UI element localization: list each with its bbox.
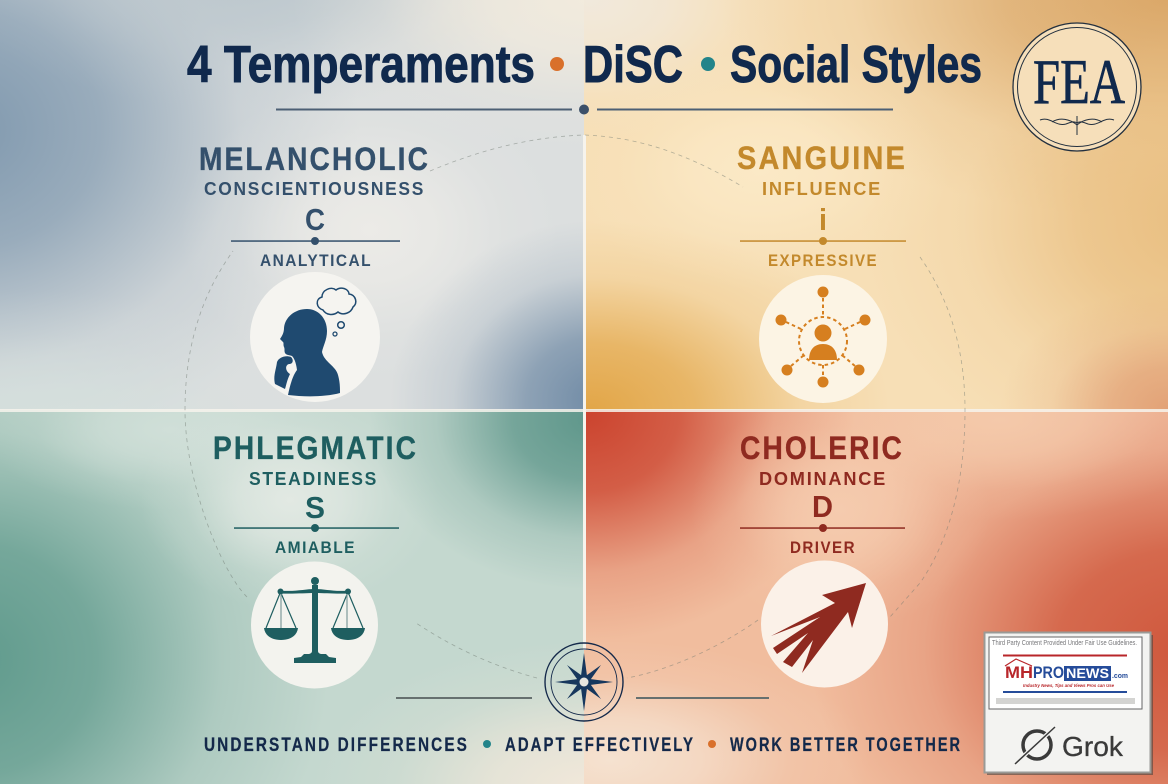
panel: melancholic: MELANCHOLIC [199,141,430,177]
badge: MHProNews logo card: NEWS [1066,665,1109,681]
footer divider lines [396,697,769,699]
panel: melancholic: C [305,202,325,237]
panel: melancholic: CONSCIENTIOUSNESS [204,178,425,199]
badge: MHProNews logo card: MH [1005,664,1033,682]
panel: choleric [740,430,905,688]
title: DiSC [583,36,683,94]
FEA seal: FEA [1033,47,1125,117]
title: 4 Temperaments [187,36,535,94]
panel: phlegmatic: S [305,490,325,525]
panel: sanguine: EXPRESSIVE [768,251,878,270]
icon: influence network [759,275,887,403]
panel: phlegmatic: PHLEGMATIC [213,430,418,466]
badge: MHProNews logo card: Industry News, Tips and Views Pros can Use [1023,683,1114,689]
panel: melancholic [199,141,430,402]
badge: Grok logo [1015,727,1124,764]
title separator dot: teal [701,57,715,71]
seal flourish [1040,116,1114,135]
title [187,36,982,94]
source badge [984,632,1153,775]
quadrant dividers [0,135,1168,650]
panel: sanguine: INFLUENCE [762,178,882,199]
panel: sanguine: i [819,202,827,237]
FEA seal [1013,23,1141,151]
background: choleric quadrant [584,410,1168,784]
footer tagline [204,735,962,756]
footer tagline: ADAPT EFFECTIVELY [505,735,695,756]
dashed orbit ring [185,135,965,678]
footer tagline: WORK BETTER TOGETHER [730,735,962,756]
background: sanguine quadrant [584,0,1168,410]
panel: phlegmatic: AMIABLE [275,538,356,557]
panel: sanguine [737,140,907,403]
badge: MHProNews logo card [989,637,1142,709]
panel: choleric: D [812,489,833,524]
title divider [276,104,893,114]
title separator dot: orange [550,57,564,71]
panel: phlegmatic: STEADINESS [249,468,378,489]
panel: phlegmatic [213,430,418,688]
icon: balance scales [251,562,378,688]
footer tagline: UNDERSTAND DIFFERENCES [204,735,469,756]
panel: sanguine: SANGUINE [737,140,907,176]
badge: MHProNews logo card: PRO [1033,664,1064,682]
panel: choleric: DOMINANCE [759,468,887,489]
badge: MHProNews logo card: .com [1112,671,1128,680]
panel: choleric: DRIVER [790,538,856,557]
panel: choleric: CHOLERIC [740,430,904,466]
icon: thought bubble [317,288,356,314]
compass emblem [545,643,623,721]
background: melancholic quadrant [0,0,584,410]
background: phlegmatic quadrant [0,410,584,784]
icon: driving arrow [761,560,888,688]
icon: thinking person [250,272,380,402]
title: Social Styles [730,36,982,94]
badge: Grok logo: Grok [1062,731,1124,762]
panel: melancholic: ANALYTICAL [260,251,372,270]
